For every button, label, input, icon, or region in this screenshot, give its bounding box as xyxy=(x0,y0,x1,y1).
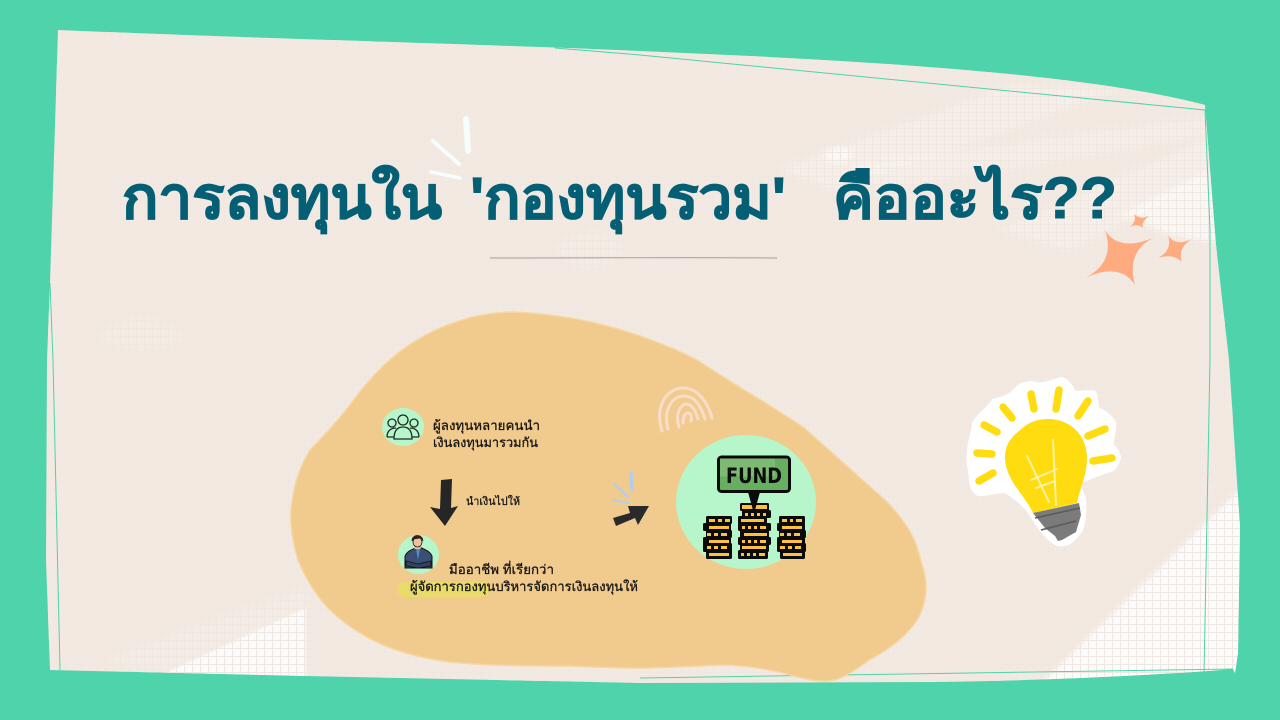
text: professional called: มืออาชีพ ที่เรียกว่า xyxy=(449,561,554,577)
title: การลงทุนใน xyxy=(122,164,442,235)
icon: fund sign: FUND xyxy=(726,464,782,488)
icon: blue rays xyxy=(613,473,632,503)
text: fund manager manages: ผู้จัดการกองทุนบริหารจัดการเงินลงทุนให้ xyxy=(410,579,638,595)
title xyxy=(122,164,1117,235)
divider xyxy=(490,257,777,259)
text: bring money to: นำเงินไปให้ xyxy=(466,495,520,508)
icon: fund manager xyxy=(398,535,439,574)
icon: investors group xyxy=(382,408,424,446)
icon: coin stacks xyxy=(703,503,806,559)
arrow: down xyxy=(430,479,458,526)
icon: rainbow xyxy=(660,388,712,431)
highlight xyxy=(397,582,490,597)
arrow: diagonal xyxy=(613,506,649,526)
title: คืออะไร?? xyxy=(833,165,1117,231)
text: investors pool money: ผู้ลงทุนหลายคนนำ xyxy=(433,418,540,434)
icon: fund sign xyxy=(718,457,790,509)
orange blob xyxy=(291,312,926,681)
text: investors pool money line 2: เงินลงทุนมารวมกัน xyxy=(433,435,538,451)
fund circle xyxy=(676,435,816,569)
decorative white rays xyxy=(431,119,468,178)
icon: orange sparkles xyxy=(1085,214,1192,285)
icon: light bulb xyxy=(967,378,1120,545)
title: 'กองทุนรวม' xyxy=(470,166,786,235)
